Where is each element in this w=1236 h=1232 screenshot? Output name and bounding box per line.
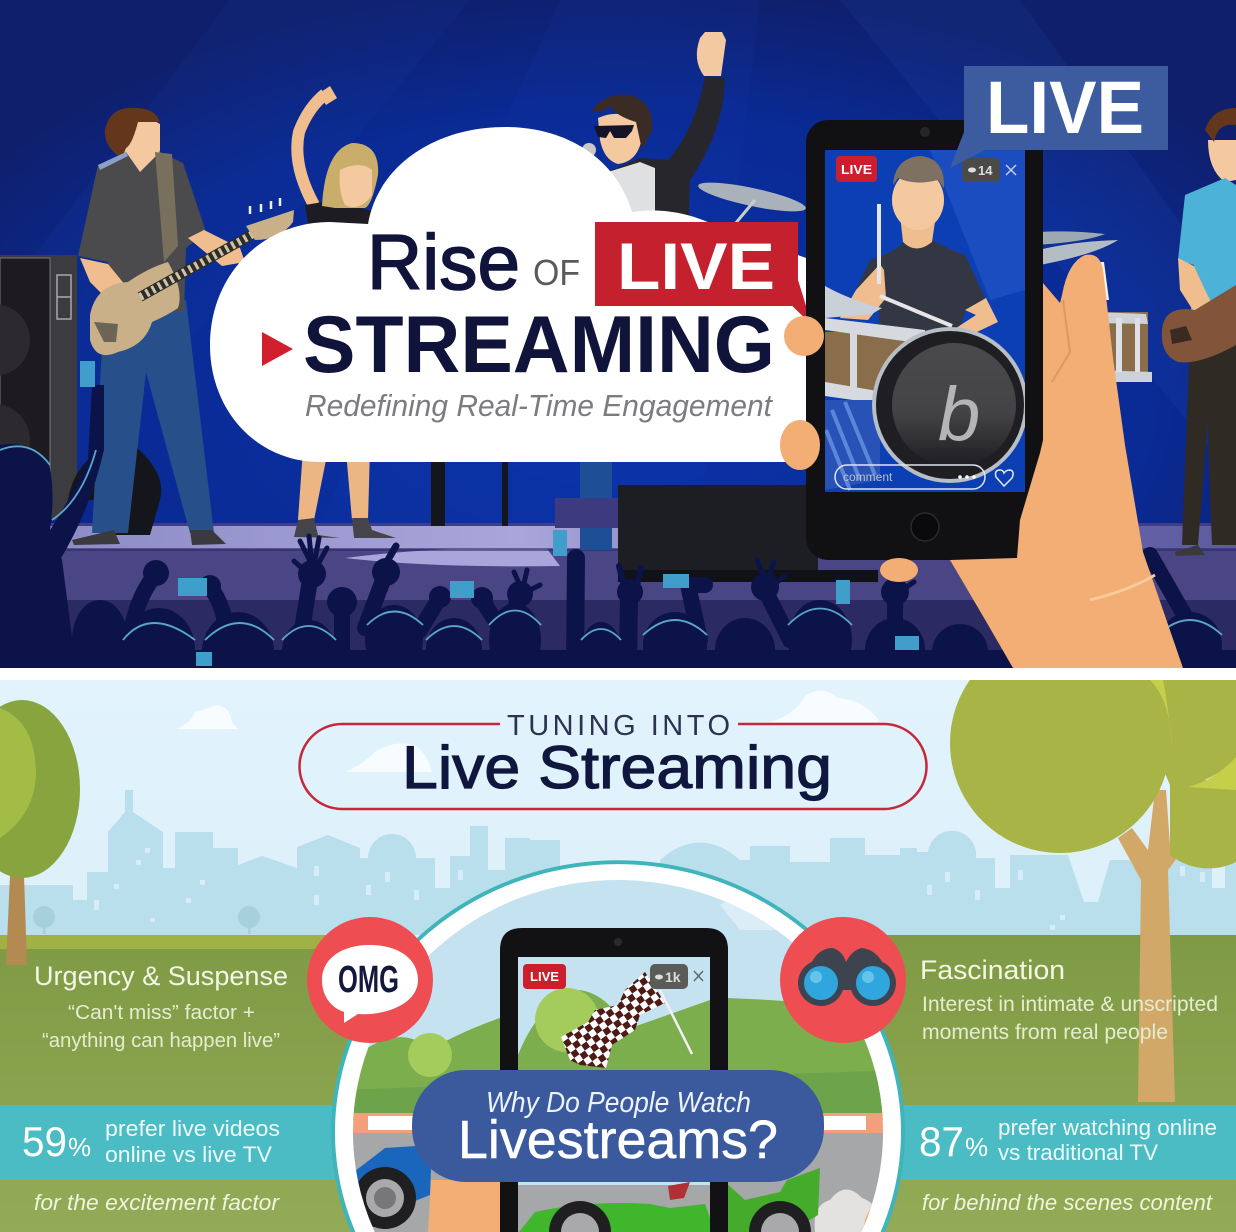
- skyline windows: [94, 848, 1205, 930]
- question pill: [412, 1070, 824, 1182]
- title: Rise of: OF: [533, 252, 580, 293]
- left ground: [0, 935, 1236, 1232]
- speaker cabinet: [0, 255, 77, 520]
- title: Rise of: [372, 232, 579, 291]
- green race car outside phone: [725, 1168, 820, 1232]
- text block: urgency and suspense: Urgency & Suspense: [34, 961, 288, 991]
- tree right: [950, 680, 1236, 1102]
- blue race car: [350, 1145, 432, 1229]
- tree left: [0, 700, 80, 965]
- stage light: [68, 448, 162, 535]
- circular scene: [331, 860, 905, 1232]
- clouds: [176, 690, 880, 772]
- guitarist right: [1162, 108, 1236, 556]
- question pill: Why Do People Watch: [486, 1087, 751, 1119]
- viewer count: [962, 158, 1000, 182]
- title: STREAMING: STREAMING: [303, 300, 775, 390]
- section title: TUNING INTO: [507, 710, 730, 742]
- title: play triangle: [262, 332, 293, 366]
- title cloud: [210, 127, 820, 462]
- question pill: Livestreams?: [458, 1110, 778, 1170]
- stat: 59 percent: 59: [22, 1118, 67, 1165]
- race car on screen: [519, 1203, 715, 1232]
- title: red LIVE banner: [595, 222, 806, 316]
- stat: 59 percent: prefer live videos: [105, 1116, 280, 1141]
- crowd silhouettes: [0, 361, 1236, 692]
- checkered flag: [561, 972, 692, 1068]
- text block: urgency and suspense: “Can't miss” factor +: [68, 1002, 255, 1024]
- section title: Live Streaming: [402, 734, 832, 801]
- smoke: [814, 1190, 872, 1232]
- blue LIVE callout: LIVE: [986, 66, 1144, 149]
- subtitle: Redefining Real-Time Engagement: [305, 388, 773, 423]
- guitarist left: [72, 108, 294, 545]
- stat: 87 percent: 87: [919, 1118, 964, 1165]
- hand under phone: [428, 1180, 505, 1232]
- stat: 59 percent: %: [68, 1132, 91, 1162]
- green race car wheels: [549, 1182, 811, 1232]
- center phone: [500, 928, 728, 1232]
- drummer: [825, 156, 998, 340]
- cymbal behind cloud: [698, 182, 806, 222]
- section title: [300, 710, 927, 809]
- live badge: [523, 964, 566, 989]
- live badge on screen: LIVE: [841, 162, 872, 177]
- binoculars icon: [780, 917, 906, 1043]
- panel: concert hero: [0, 0, 1236, 692]
- text block: fascination: Fascination: [920, 955, 1065, 985]
- panel: why people watch: [0, 633, 1236, 1232]
- viewer count: 1k: [665, 969, 681, 985]
- text block: fascination: moments from real people: [922, 1021, 1168, 1044]
- comment bar: comment: [843, 470, 893, 484]
- stat: 87 percent: prefer watching online: [998, 1115, 1217, 1140]
- female singer: [294, 86, 396, 538]
- stat: 59 percent: [22, 1116, 280, 1167]
- small trees in skyline: [33, 906, 260, 934]
- viewer count: [650, 964, 688, 989]
- caption: excitement factor: for the excitement factor: [34, 1190, 281, 1215]
- blue LIVE callout: [950, 66, 1168, 168]
- text block: urgency and suspense: [34, 961, 288, 1052]
- text block: fascination: Interest in intimate & unscripted: [922, 993, 1218, 1016]
- smartphone: [806, 120, 1043, 560]
- OMG icon: [307, 917, 433, 1043]
- teal band right: [840, 1105, 1236, 1180]
- lead singer: [582, 32, 726, 216]
- hand holding phone: [780, 255, 1183, 668]
- stat: 87 percent: %: [965, 1132, 988, 1162]
- caption: behind the scenes: for behind the scenes content: [922, 1190, 1213, 1215]
- white divider band: [0, 668, 1236, 680]
- phone screen: [825, 150, 1028, 492]
- drummer kit right of phone: [1043, 231, 1152, 382]
- drum logo: b: [938, 372, 980, 457]
- close icon: [694, 971, 703, 981]
- stat: 87 percent: [919, 1115, 1217, 1165]
- stat: 87 percent: vs traditional TV: [998, 1140, 1158, 1165]
- stat: 59 percent: online vs live TV: [105, 1142, 272, 1167]
- teal band left: [0, 1105, 400, 1180]
- stage floor: [50, 523, 1236, 650]
- mic stands and stage props: [431, 460, 878, 582]
- text block: urgency and suspense: “anything can happen live”: [42, 1030, 280, 1052]
- city skyline: [0, 790, 1236, 935]
- live badge on screen: [836, 156, 877, 182]
- drum kit on screen: [825, 318, 1028, 490]
- text block: fascination: [920, 955, 1218, 1044]
- heart icon: [996, 470, 1013, 486]
- comment bar: [835, 465, 985, 489]
- viewer count: 14: [978, 163, 993, 178]
- title: Rise of: Rise: [367, 218, 520, 306]
- close icon: [1006, 165, 1016, 175]
- live badge: LIVE: [530, 969, 559, 984]
- title: red LIVE banner: LIVE: [617, 229, 775, 303]
- OMG icon: OMG: [338, 959, 399, 1001]
